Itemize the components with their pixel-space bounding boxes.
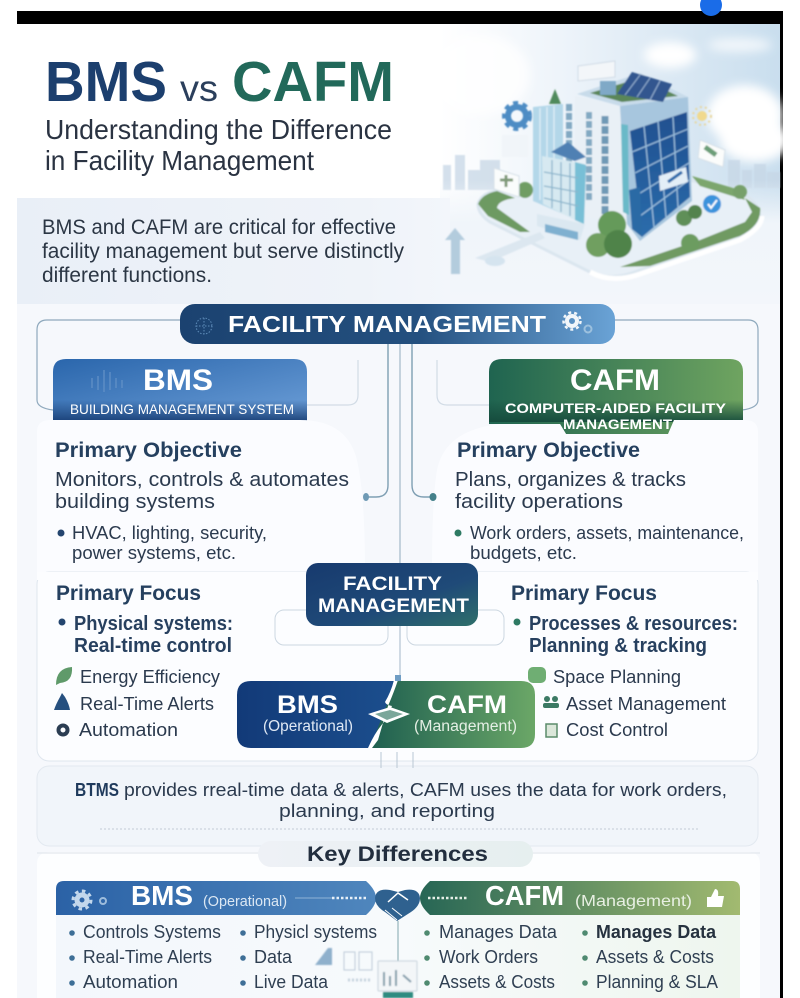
connector to monitor xyxy=(397,921,399,962)
connector dots xyxy=(363,493,436,501)
summary band: provides rreal-time data & alerts, CAFM uses the data for work orders, xyxy=(124,779,727,800)
key differences list: BMS: Live Data xyxy=(254,972,329,992)
key differences list: BMS xyxy=(69,922,377,992)
intro band: facility management but serve distinctly xyxy=(42,240,404,263)
key differences list: CAFM: Assets & Costs xyxy=(596,947,714,967)
subtitle: in Facility Management xyxy=(45,145,314,176)
icon: lightning divider xyxy=(368,675,410,748)
key differences list: CAFM: Assets & Costs xyxy=(439,972,555,992)
icon: leaf xyxy=(56,667,72,685)
connector frames xyxy=(37,320,758,410)
key differences list: CAFM: Manages Data xyxy=(596,922,717,942)
icon: gears xyxy=(564,312,592,332)
icon: cost control xyxy=(546,724,557,737)
panel: CAFM primary focus: Cost Control xyxy=(566,720,668,740)
key differences list: BMS: Automation xyxy=(83,972,178,992)
panel: BMS primary focus: Real-Time Alerts xyxy=(80,694,214,714)
road xyxy=(475,232,545,262)
panel: CAFM header: CAFM xyxy=(570,364,660,397)
panel: BMS objective: Primary Objective xyxy=(55,439,242,462)
panel: BMS objective: Monitors, controls & automates xyxy=(55,468,349,491)
key differences list: CAFM: Planning & SLA xyxy=(596,972,718,992)
glass facade xyxy=(630,112,690,237)
summary band: planning, and reporting xyxy=(279,800,495,821)
summary band: BTMS xyxy=(75,779,119,800)
panel: CAFM primary focus: Processes & resources: xyxy=(529,612,738,635)
key differences list: CAFM: Manages Data xyxy=(439,922,558,942)
title: CAFM xyxy=(232,50,394,114)
main tower left face xyxy=(575,96,627,224)
panel: BMS header: BUILDING MANAGEMENT SYSTEM xyxy=(70,401,294,417)
panel: BMS primary focus: Real-time control xyxy=(74,634,232,657)
panel: CAFM objective: budgets, etc. xyxy=(470,543,577,563)
bar: CAFM management: CAFM xyxy=(485,880,564,911)
panel: BMS objective xyxy=(37,420,365,572)
subtitle: Understanding the Difference xyxy=(45,114,392,145)
icon: gears xyxy=(73,891,106,909)
icon: space planning xyxy=(528,667,546,683)
key differences list: CAFM: Work Orders xyxy=(439,947,538,967)
key differences list: BMS: Real-Time Alerts xyxy=(83,947,212,967)
lower block xyxy=(542,156,585,224)
entrance xyxy=(537,214,585,240)
icon: thumbs up xyxy=(707,889,724,907)
subtitle xyxy=(45,114,392,176)
small disc xyxy=(485,256,505,266)
top black bar xyxy=(17,11,783,24)
check badge xyxy=(703,195,721,213)
icon: alert xyxy=(54,693,70,710)
building base platform xyxy=(478,180,759,277)
panel: CAFM header xyxy=(489,359,743,434)
panel: primary focus xyxy=(37,572,758,761)
blue status dot xyxy=(700,0,722,16)
panel: BMS objective: building systems xyxy=(55,490,215,513)
BMS and CAFM comparison box: CAFM xyxy=(427,691,507,719)
title xyxy=(45,50,394,114)
bar: BMS operational: (Operational) xyxy=(203,893,287,910)
icon: analytics monitor xyxy=(315,948,417,998)
icon: up arrow xyxy=(445,228,465,274)
center box: facility management xyxy=(306,563,478,626)
key differences list: BMS: Controls Systems xyxy=(83,922,221,942)
panel: BMS primary focus: Energy Efficiency xyxy=(80,667,220,687)
summary band xyxy=(37,752,758,846)
panel: BMS objective: HVAC, lighting, security, xyxy=(72,523,267,543)
panel: BMS header: BMS xyxy=(143,364,213,397)
header background with sky xyxy=(17,24,790,304)
key differences list: CAFM xyxy=(424,922,718,992)
right black border xyxy=(780,24,783,998)
left wing xyxy=(533,104,563,214)
panel: key differences xyxy=(37,852,760,998)
connector lines xyxy=(366,344,432,680)
heading: key differences: Key Differences xyxy=(307,843,488,866)
panel: CAFM objective: Primary Objective xyxy=(457,439,640,462)
panel: CAFM primary focus xyxy=(511,582,738,740)
panel: CAFM objective xyxy=(432,420,758,572)
heading pill: facility management xyxy=(180,304,615,344)
key differences list: BMS: Physicl systems xyxy=(254,922,377,942)
panel: CAFM objective: Plans, organizes & tracks xyxy=(455,468,686,491)
hedges xyxy=(478,191,530,232)
panel: BMS objective: power systems, etc. xyxy=(72,543,236,563)
panel: CAFM primary focus: Primary Focus xyxy=(511,582,657,605)
panel: CAFM primary focus: Space Planning xyxy=(553,667,681,687)
center box: facility management: MANAGEMENT xyxy=(318,595,469,617)
key differences list: BMS: Data xyxy=(254,947,293,967)
illustration: smart building xyxy=(475,61,762,279)
intro band xyxy=(17,198,450,304)
title: vs xyxy=(180,68,218,109)
title: BMS xyxy=(45,50,167,114)
CAFM header subtitle: COMPUTER-AIDED FACILITY xyxy=(505,400,727,416)
main tower right frame xyxy=(620,97,692,241)
icon: people xyxy=(543,696,559,708)
bar: BMS operational: BMS xyxy=(131,880,193,911)
BMS and CAFM comparison box: (Management) xyxy=(414,718,517,735)
panel: CAFM objective: facility operations xyxy=(455,490,623,513)
trees xyxy=(598,211,626,239)
icon: automation gear xyxy=(58,726,68,734)
heading pill: facility management: FACILITY MANAGEMENT xyxy=(228,311,546,337)
icon: dotted globe xyxy=(196,318,212,334)
panel: BMS primary focus xyxy=(54,582,233,740)
panel: BMS primary focus: Primary Focus xyxy=(56,582,201,605)
floating cards xyxy=(494,168,519,197)
panel: BMS header xyxy=(53,359,307,422)
bar: CAFM management xyxy=(420,880,740,915)
BMS and CAFM comparison box: BMS xyxy=(277,691,338,719)
heading: key differences xyxy=(258,841,533,867)
panel: CAFM primary focus: Planning & tracking xyxy=(529,634,707,657)
sign on glass xyxy=(659,167,688,191)
panel: CAFM primary focus: Asset Management xyxy=(566,694,726,714)
center box: facility management: FACILITY xyxy=(343,573,442,595)
CAFM header subtitle xyxy=(505,400,727,432)
panel: CAFM objective: Work orders, assets, maintenance, xyxy=(470,523,744,543)
floating gear xyxy=(508,107,526,125)
icon: handshake xyxy=(375,890,420,921)
BMS and CAFM comparison box xyxy=(237,675,535,748)
intro band: different functions. xyxy=(42,264,212,287)
bar: BMS operational xyxy=(56,880,376,915)
CAFM header subtitle: MANAGEMENT xyxy=(563,416,672,432)
intro band: BMS and CAFM are critical for effective xyxy=(42,216,396,239)
bar: CAFM management: (Management) xyxy=(575,893,692,910)
BMS and CAFM comparison box: (Operational) xyxy=(263,718,353,735)
panel: BMS primary focus: Physical systems: xyxy=(74,612,233,635)
roof xyxy=(577,73,688,106)
panel: BMS primary focus: Automation xyxy=(79,720,178,740)
